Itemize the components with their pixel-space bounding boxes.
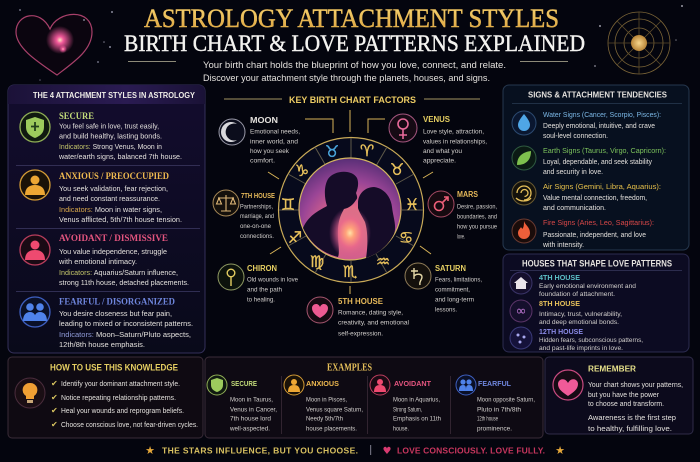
factor: saturn: Fears, limitations,	[435, 276, 482, 284]
factor: 5th house: Romance, dating style,	[338, 310, 403, 316]
4th house: Early emotional environment and	[539, 283, 636, 290]
factor: 5th house	[307, 297, 410, 338]
zodiac glyphs: ♉︎	[390, 160, 404, 179]
factor: 5th house: self-expression.	[338, 330, 383, 338]
remember text: Your chart shows your patterns,	[588, 380, 683, 389]
footer banner: THE STARS INFLUENCE, BUT YOU CHOOSE.	[162, 446, 358, 456]
style: anxious: Venus afflicted, 5th/7th house tension.	[59, 215, 182, 224]
factor: saturn	[405, 263, 482, 314]
factor: mars: boundaries, and	[457, 214, 497, 220]
example: avoidant: Emphasis on 11th	[393, 416, 441, 422]
water signs: Water Signs (Cancer, Scorpio, Pisces):	[543, 110, 661, 119]
checklist: Notice repeating relationship patterns.	[61, 393, 176, 402]
fire signs: with intensity.	[542, 240, 584, 249]
factor: 7th house: Partnerships,	[240, 204, 273, 210]
factor: chiron	[218, 264, 298, 304]
remember text: Awareness is the first step	[588, 413, 676, 422]
factor: 7th house: one-on-one	[240, 223, 271, 230]
air signs: Air Signs (Gemini, Libra, Aquarius):	[543, 182, 661, 191]
factor: moon: inner world, and	[250, 138, 298, 146]
factor: 7th house: marriage, and	[240, 213, 274, 220]
zodiac glyphs: ♐︎	[288, 228, 302, 247]
style: avoidant: You value independence, struggle	[59, 247, 167, 256]
water signs	[512, 110, 661, 140]
zodiac glyphs: ♍︎	[310, 252, 324, 271]
zodiac glyphs	[281, 141, 419, 281]
example: anxious: ANXIOUS	[306, 381, 339, 388]
zodiac glyphs: ♈︎	[360, 141, 374, 160]
12th house: 12TH HOUSE	[539, 327, 583, 336]
factor: venus: values in relationships,	[423, 138, 487, 146]
factor: mars: how you pursue	[457, 224, 497, 230]
8th house: 8TH HOUSE	[539, 299, 580, 308]
4th house: 4TH HOUSE	[539, 273, 580, 282]
8th house: and deep emotional bonds.	[539, 319, 619, 326]
zodiac glyphs: ♏︎	[343, 262, 357, 281]
factor: chiron: to healing.	[247, 296, 275, 304]
example: fearful	[456, 375, 535, 432]
8th house: ∞	[516, 304, 526, 319]
birth chart wheel	[278, 138, 424, 282]
checklist: ✔	[51, 379, 58, 388]
4th house: foundation of attachment.	[539, 291, 615, 298]
fire signs: Passionate, independent, and love	[543, 230, 646, 239]
factor: mars: Desire, passion,	[457, 204, 497, 210]
example: fearful: 12th house	[477, 416, 498, 422]
style: fearful: leading to mixed or inconsistent patterns.	[59, 319, 193, 328]
connectors	[268, 110, 433, 294]
footer banner	[145, 444, 565, 457]
checklist: ✔	[51, 393, 58, 402]
zodiac glyphs: ♒︎	[376, 252, 390, 271]
example: fearful: Pluto in 7th/8th	[477, 406, 521, 414]
example: anxious: house placements.	[306, 426, 357, 432]
example: fearful: Moon opposite Saturn,	[477, 396, 535, 404]
style: fearful: FEARFUL / DISORGANIZED	[59, 298, 175, 308]
intro text	[128, 60, 568, 83]
style: avoidant: with emotional intimacy.	[58, 257, 137, 266]
fire signs	[512, 218, 654, 249]
example: secure	[207, 375, 277, 432]
air signs	[512, 181, 661, 212]
example: anxious: Needy 5th/7th	[306, 416, 343, 422]
style: secure: SECURE	[59, 112, 94, 122]
factor: mars: love.	[457, 234, 465, 240]
subtitle: BIRTH CHART & LOVE PATTERNS EXPLAINED	[124, 31, 585, 56]
factor: 5th house: creativity, and emotional	[338, 320, 410, 326]
icon: light bulb	[15, 378, 45, 408]
checklist: ✔	[51, 420, 58, 429]
panel heading: HOUSES THAT SHAPE LOVE PATTERNS	[522, 258, 672, 268]
earth signs: and security in love.	[543, 167, 603, 176]
remember text: to choose and transform.	[588, 399, 664, 408]
factor: moon: Emotional needs,	[250, 128, 300, 136]
title: ASTROLOGY ATTACHMENT STYLES	[144, 4, 559, 33]
factor: moon: how you seek	[250, 148, 290, 155]
icon: glowing heart	[16, 9, 113, 81]
remember text	[588, 380, 683, 433]
style: avoidant	[20, 234, 189, 287]
style: avoidant: AVOIDANT / DISMISSIVE	[59, 234, 168, 244]
earth signs: Earth Signs (Taurus, Virgo, Capricorn):	[543, 146, 666, 155]
panel: how to use this knowledge	[8, 357, 203, 438]
4th house	[510, 272, 636, 298]
factor: venus: appreciate.	[423, 158, 456, 164]
checklist: Choose conscious love, not fear-driven cycles.	[61, 420, 198, 429]
factor: moon	[219, 116, 300, 164]
footer banner: ★	[555, 444, 565, 457]
checklist: Heal your wounds and reprogram beliefs.	[61, 406, 184, 415]
style: secure: You feel safe in love, trust easily,	[59, 122, 159, 130]
style: fearful: 12th/8th house emphasis.	[59, 340, 145, 349]
panel: signs and attachment tendencies	[503, 85, 689, 250]
intro text: Discover your attachment style through the planets, houses, and signs.	[203, 73, 490, 83]
example: fearful: FEARFUL	[478, 381, 512, 388]
factor: chiron: Old wounds in love	[247, 276, 298, 284]
water signs: soul-level connection.	[543, 131, 608, 140]
style: fearful: You desire closeness but fear pain,	[59, 309, 172, 318]
12th house: Hidden fears, subconscious patterns,	[539, 337, 643, 344]
style: anxious: and need constant reassurance.	[59, 194, 160, 203]
factor: saturn: commitment,	[435, 286, 470, 294]
earth signs	[512, 146, 666, 176]
example: avoidant	[370, 375, 441, 432]
style: secure	[20, 112, 182, 161]
remember text: but you have the power	[588, 390, 659, 399]
panel: the 4 attachment styles	[8, 85, 205, 353]
zodiac glyphs: ♋︎	[399, 228, 413, 247]
checklist: Identify your dominant attachment style.	[61, 379, 180, 388]
panel heading: SIGNS & ATTACHMENT TENDENCIES	[528, 90, 668, 100]
factor: 7th house: connections.	[240, 233, 274, 240]
style: avoidant: Indicators: Aquarius/Saturn influence,	[59, 268, 178, 277]
example: anxious: Moon in Pisces,	[306, 396, 347, 404]
panel: houses that shape love patterns	[503, 254, 689, 352]
icon: zodiac wheel with moon	[594, 5, 683, 74]
zodiac glyphs: ♓︎	[405, 195, 419, 214]
factor: moon: MOON	[250, 116, 278, 125]
style: anxious: You seek validation, fear rejection,	[59, 184, 168, 193]
factor: chiron: and the path	[247, 286, 282, 294]
factor: chiron: CHIRON	[247, 264, 277, 273]
icon: heart	[553, 370, 583, 400]
style: anxious: Indicators: Moon in water signs,	[59, 205, 162, 214]
style: avoidant: strong 11th house, detached placements.	[59, 278, 189, 287]
style: anxious: ANXIOUS / PREOCCUPIED	[59, 172, 169, 182]
factor: venus	[389, 114, 487, 164]
8th house: Intimacy, trust, vulnerability,	[539, 311, 622, 318]
example: anxious: Venus square Saturn,	[306, 406, 363, 414]
example: avoidant: house.	[393, 426, 409, 432]
example: anxious	[284, 375, 363, 432]
8th house	[510, 299, 622, 326]
zodiac glyphs: ♉︎	[325, 142, 339, 161]
intro text: Your birth chart holds the blueprint of how you love, connect, and relate.	[203, 60, 506, 70]
style: secure: and build healthy, lasting bonds.	[59, 132, 162, 140]
factor: 5th house: 5TH HOUSE	[338, 297, 384, 306]
checklist: ✔	[51, 406, 58, 415]
example: secure: well-aspected.	[229, 426, 270, 432]
example: avoidant: Moon in Aquarius,	[393, 396, 440, 404]
12th house: and past-life imprints in love.	[539, 345, 623, 352]
example: secure: 7th house lord	[230, 416, 271, 422]
panel heading: REMEMBER	[588, 364, 636, 374]
example: avoidant: Strong Saturn,	[393, 406, 422, 414]
heading: key birth chart factors: KEY BIRTH CHART FACTORS	[289, 95, 416, 106]
style: anxious	[20, 170, 182, 224]
factor: venus: Love style, attraction,	[423, 128, 484, 136]
zodiac glyphs: ♑︎	[295, 161, 309, 180]
panel: examples	[205, 357, 543, 438]
air signs: and communication.	[543, 203, 606, 212]
style: secure: water/earth signs, balanced 7th house.	[58, 152, 182, 161]
factor: saturn: and long-term	[435, 296, 474, 304]
panel: remember	[545, 357, 693, 434]
checklist	[51, 379, 198, 429]
example: secure: Venus in Cancer,	[230, 406, 277, 414]
factor: mars	[428, 190, 497, 240]
style: fearful: Indicators: Moon–Saturn/Pluto aspects,	[59, 330, 191, 339]
panel heading: EXAMPLES	[327, 362, 372, 374]
footer banner: LOVE CONSCIOUSLY. LOVE FULLY.	[397, 446, 545, 456]
factor: venus: VENUS	[423, 115, 451, 124]
remember text: to healthy, fulfilling love.	[588, 424, 672, 433]
zodiac glyphs: ♊︎	[281, 195, 295, 214]
style: secure: Indicators: Strong Venus, Moon in	[59, 142, 162, 151]
earth signs: Loyal, dependable, and seek stability	[543, 157, 652, 166]
example: secure: SECURE	[231, 381, 257, 388]
factor: saturn: SATURN	[435, 264, 466, 273]
style: fearful	[20, 297, 193, 349]
factor: 7th house: 7TH HOUSE	[241, 191, 275, 200]
air signs: Value mental connection, freedom,	[543, 193, 647, 202]
footer banner: ★	[145, 444, 155, 457]
factor: saturn: lessons.	[435, 306, 457, 314]
example: fearful: prominence.	[477, 426, 512, 432]
factor: venus: and what you	[423, 148, 462, 155]
water signs: Deeply emotional, intuitive, and crave	[543, 121, 655, 130]
12th house	[510, 327, 643, 352]
panel heading: HOW TO USE THIS KNOWLEDGE	[50, 362, 178, 372]
couple silhouette	[303, 172, 395, 258]
factor: moon: comfort.	[250, 158, 275, 164]
factor: 7th house	[213, 190, 275, 240]
example: avoidant: AVOIDANT	[394, 381, 432, 388]
footer banner: ♥	[383, 446, 392, 457]
factor: mars: MARS	[457, 190, 479, 199]
panel heading: THE 4 ATTACHMENT STYLES IN ASTROLOGY	[33, 91, 196, 100]
example: secure: Moon in Taurus,	[230, 396, 273, 404]
fire signs: Fire Signs (Aries, Leo, Sagittarius):	[543, 218, 654, 227]
